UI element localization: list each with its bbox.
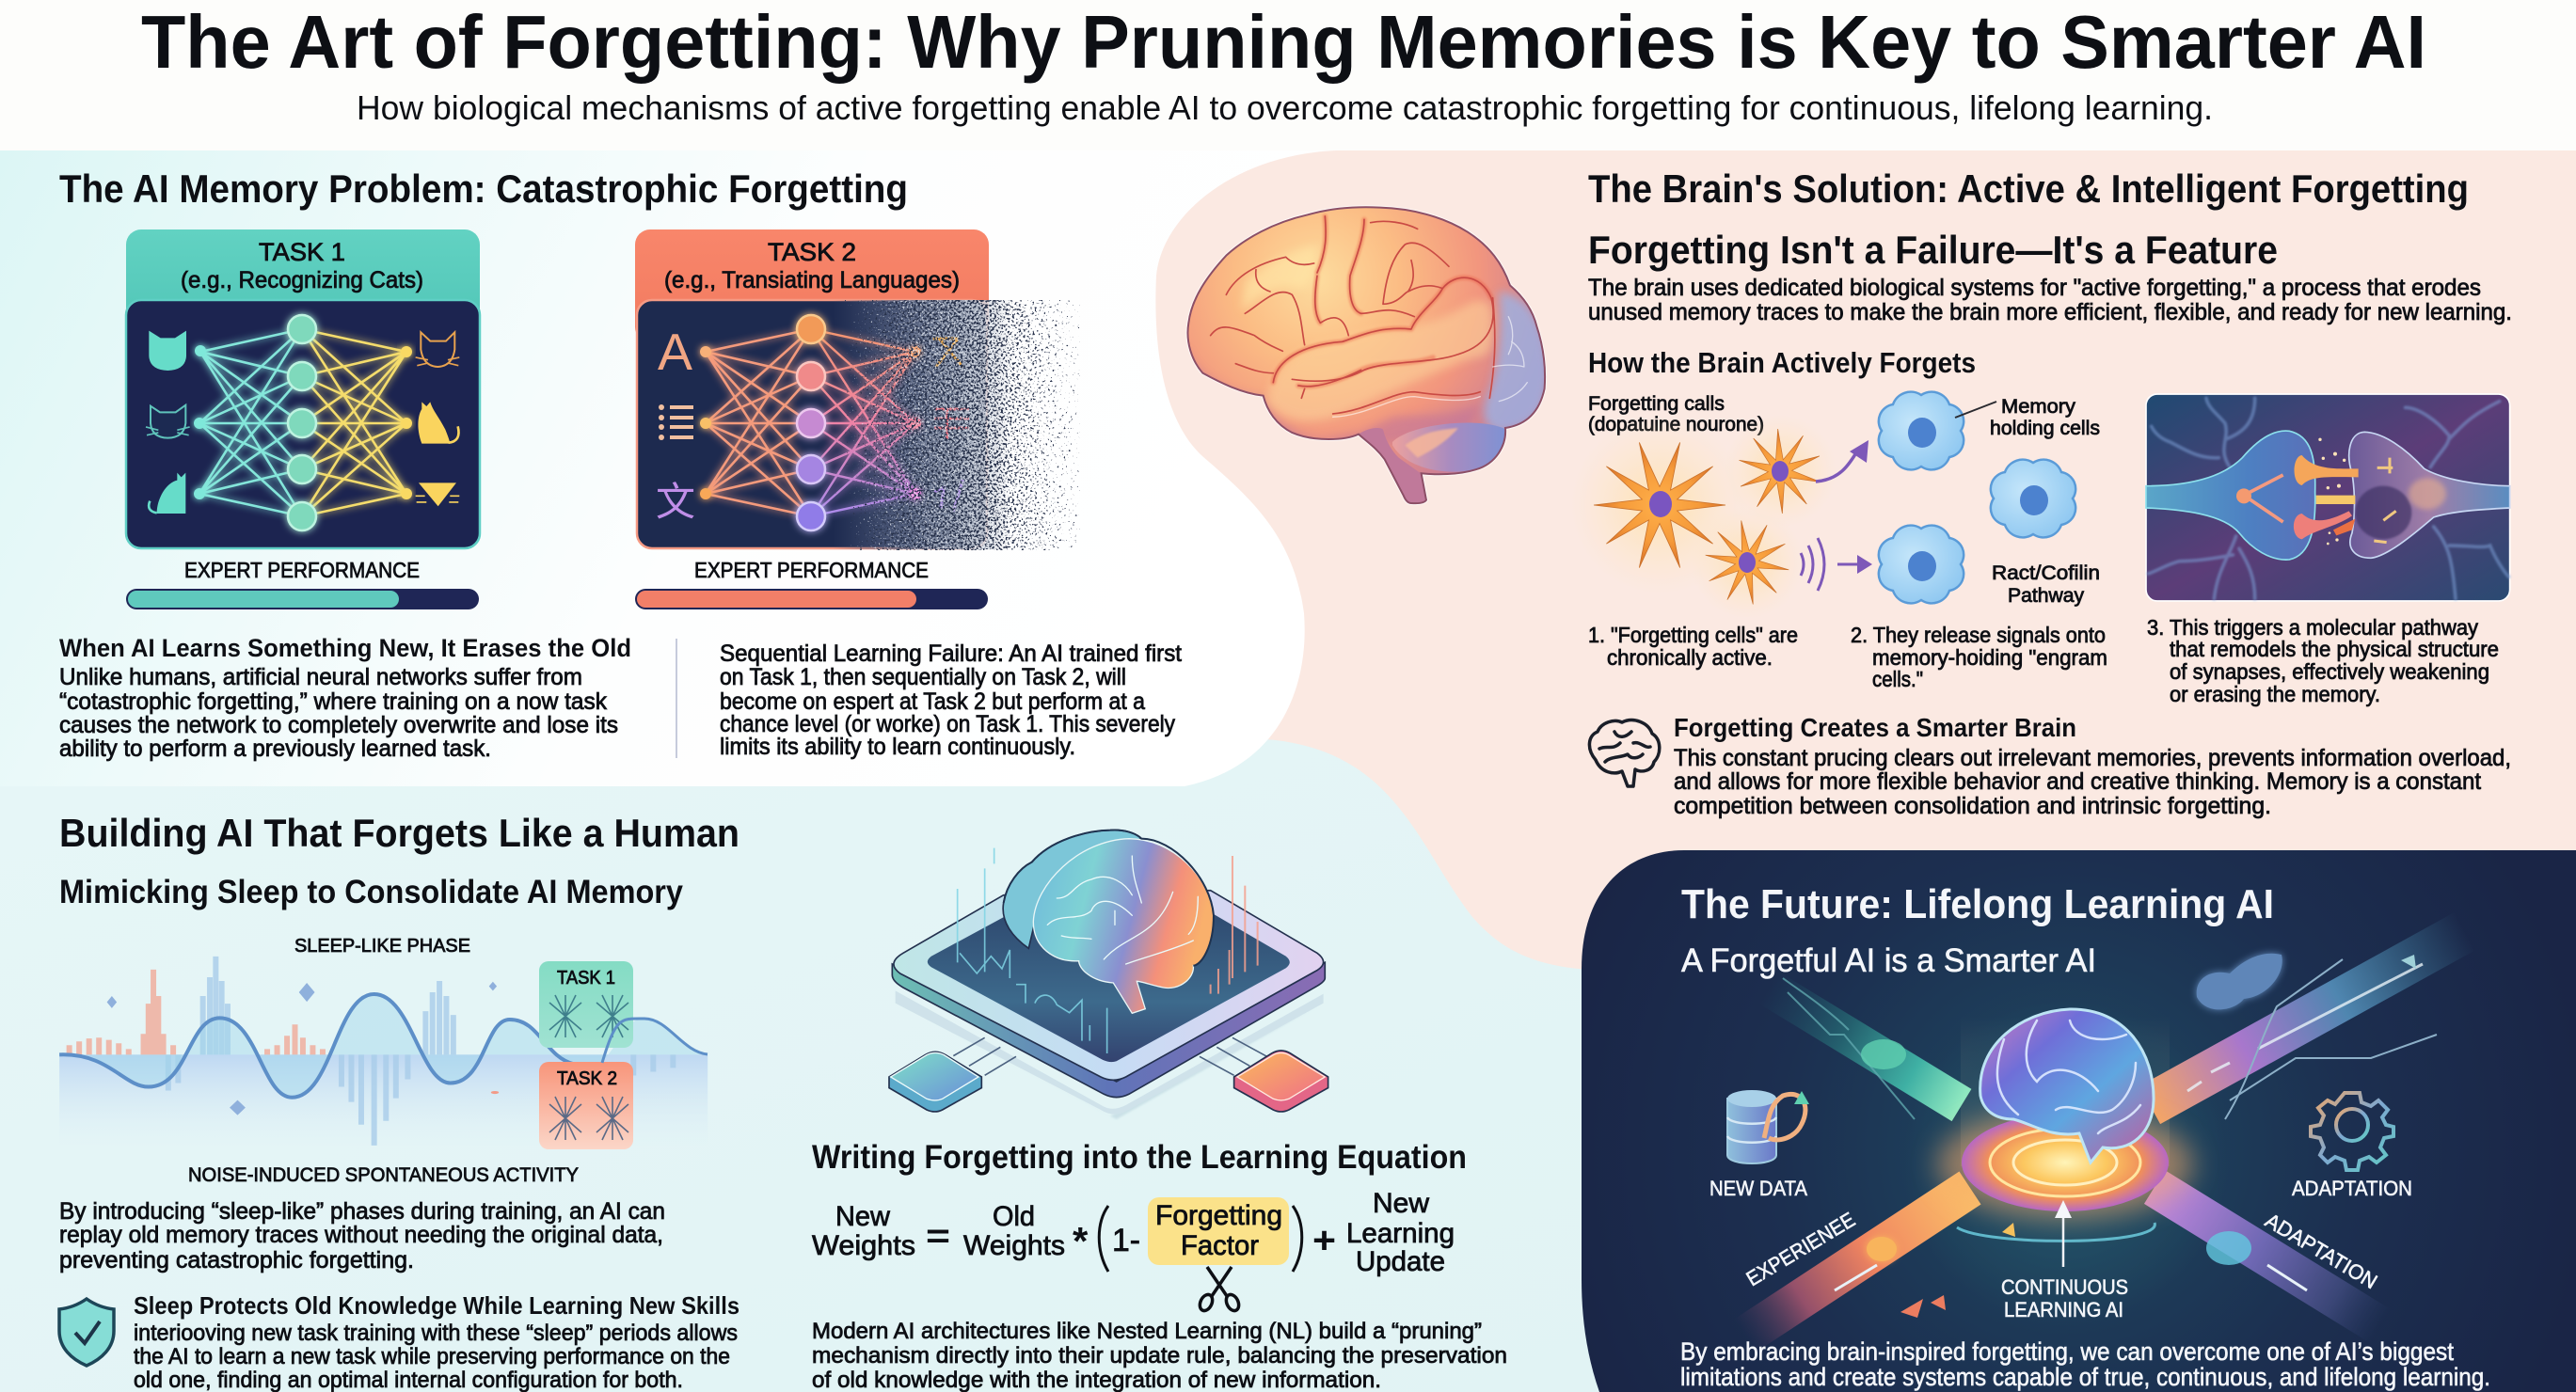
body text: left: Unlike humans, artificial neural networks suffer from [59,664,582,690]
equation [812,1188,1455,1277]
callout text: This constant prucing clears out irrelevant memories, prevents information overload, [1674,745,2511,771]
task 1 performance bar [126,589,479,609]
step 2 [1851,623,2107,691]
panel: building AI that forgets [59,811,1507,1392]
body text: preventing catastrophic forgetting. [59,1247,414,1273]
panel: the future [1582,850,2576,1392]
shield text [134,1321,738,1392]
step 3: that remodels the physical structure [2170,637,2499,661]
icon: CJK character: 文 [656,480,695,524]
task 1 sleep label: TASK 1 [557,968,615,989]
dissolving memory effect [828,300,1080,550]
callout text [1674,745,2511,819]
label: continuous learning AI: LEARNING AI [2004,1298,2123,1321]
step 1: chronically active. [1607,645,1773,670]
equation text: Modern AI architectures like Nested Learning (NL) build a “pruning” [812,1319,1482,1344]
label: adaptation (angled): ADAPTATION [2261,1209,2381,1293]
task 1 label: TASK 1 [259,238,345,266]
label: continuous learning AI [2001,1275,2128,1321]
step 2: 2. They release signals onto [1851,623,2106,647]
body text: unused memory traces to make the brain more efficient, flexible, and ready for new learning. [1588,299,2512,325]
task 1 sleep box [539,961,633,1048]
label: forgetting calls: Forgetting calls [1588,393,1725,415]
equation: Update [1356,1246,1445,1277]
task 2 card [59,229,1182,762]
body text: right: limits its ability to learn continuously. [720,734,1075,760]
icon: cloud [2197,954,2282,1009]
heading: Building AI That Forgets Like a Human [59,811,739,855]
equation: New [835,1201,890,1232]
forgetting factor highlight [1148,1197,1289,1265]
task 1 performance label: EXPERT PERFORMANCE [184,558,420,582]
body text: right: on Task 1, then sequentially on Task 2, will [720,664,1126,690]
body text [1588,275,2512,325]
body text: right: become on espert at Task 2 but perform at a [720,688,1145,715]
subtitle: How biological mechanisms of active forgetting enable AI to overcome catastrophic forgetting for continuous, lifelong learning. [357,88,2213,127]
subheading: A Forgetful AI is a Smarter AI [1681,942,2096,979]
step 1 [1588,623,1798,670]
icon: letter A: A [658,323,692,381]
neural network: task 1 [194,315,412,530]
background: pink brain region [1082,150,2576,1091]
equation text: mechanism directly into their update rule, balancing the preservation [812,1343,1507,1368]
diagram: forgetting cells and memory cells [1570,392,2075,619]
step 2: memory-hoiding "engram [1872,645,2107,670]
callout text: and allows for more flexible behavior and creative thinking. Memory is a constant [1674,768,2481,795]
body text: left: ability to perform a previously learned task. [59,736,491,762]
subheading: how: How the Brain Actively Forgets [1588,346,1976,379]
icon: scissors [1198,1267,1241,1313]
shield heading: Sleep Protects Old Knowledge While Learning New Skills [134,1291,739,1320]
task 2 label: TASK 2 [768,238,856,266]
equation: Old [993,1201,1035,1232]
closing text: limitations and create systems capable of true, continuous, and lifelong learning. [1680,1363,2490,1391]
body text: replay old memory traces without needing the original data, [59,1222,663,1248]
equation: * [1073,1219,1089,1263]
equation heading: Writing Forgetting into the Learning Equation [812,1139,1467,1176]
heading: The Future: Lifelong Learning AI [1681,881,2274,927]
label: pathway [1992,562,2100,607]
task 2 example: (e.g., Transiating Languages) [664,267,960,293]
signal waves and arrow [1801,538,1872,591]
body text: right [720,641,1182,760]
subheading: Mimicking Sleep to Consolidate AI Memory [59,874,683,910]
illustration: anatomical brain [1185,207,1549,503]
label: memory holding cells: holding cells [1990,418,2100,439]
step 3 [2147,615,2499,706]
step 3: 3. This triggers a molecular pathway [2147,615,2478,640]
callout heading: Forgetting Creates a Smarter Brain [1674,713,2076,742]
body text [59,1198,665,1273]
equation: Learning [1346,1218,1455,1249]
task 1 card [126,229,480,548]
task 1 example: (e.g., Recognizing Cats) [181,267,423,293]
step 3: of synapses, effectively weakening [2170,659,2489,684]
panel: brain's solution [1570,166,2512,819]
shield text: interiooving new task training with these “sleep” periods allows [134,1321,738,1346]
equation text [812,1319,1507,1392]
body text: left: “cotastrophic forgetting,” where training on a now task [59,688,607,715]
body text: left [59,664,618,762]
equation: Weights [812,1230,915,1261]
chart label: SLEEP-LIKE PHASE [294,936,470,957]
callout text: competition between consolidation and intrinsic forgetting. [1674,793,2271,819]
subheading: Forgetting Isn't a Failure—It's a Feature [1588,228,2278,272]
icon: shield [59,1299,114,1366]
forgetting factor highlight: Factor [1181,1230,1259,1261]
label: forgetting calls: (dopatuine nourone) [1588,414,1764,435]
task 2 performance label: EXPERT PERFORMANCE [694,558,929,582]
title: The Art of Forgetting: Why Pruning Memories is Key to Smarter AI [141,0,2426,84]
arrow: signal to memory cell [1816,440,1868,482]
label: continuous learning AI: CONTINUOUS [2001,1275,2128,1299]
label: forgetting calls [1588,393,1764,435]
icon: brain outline [1589,720,1660,786]
task 2 performance bar [635,589,988,609]
label: pathway: Pathway [2008,585,2085,607]
label: experience (angled): EXPERIENEE [1742,1208,1859,1290]
illustration: data ribbons [1745,931,2465,1336]
grey erosion layer [833,300,1011,549]
label: pathway: Ract/Cofilin [1992,562,2100,584]
icon: list [659,404,693,440]
closing text: By embracing brain-inspired forgetting, we can overcome one of AI’s biggest [1680,1337,2454,1366]
equation: Weights [963,1230,1065,1261]
subheading: When AI Learns Something New, It Erases the Old [59,634,631,662]
icons: cats [146,331,459,514]
step 1: 1. "Forgetting cells" are [1588,623,1798,647]
panel background card [0,150,1336,786]
illustration: glowing brain [1980,1009,2154,1163]
neural network: task 2 [700,315,921,530]
step 2: cells." [1872,667,1923,691]
heading: The Brain's Solution: Active & Intelligent Forgetting [1588,166,2469,211]
body text: By introducing “sleep-like” phases during training, an AI can [59,1198,665,1225]
equation: + [1312,1220,1336,1261]
body text: right: Sequential Learning Failure: An AI trained first [720,641,1182,667]
panel background [1582,850,2576,1392]
glowing core rings [1937,1110,2193,1219]
icon: gear [2311,1093,2393,1170]
shield text: the AI to learn a new task while preserving performance on the [134,1344,730,1369]
closing text [1680,1337,2490,1391]
heading: The AI Memory Problem: Catastrophic Forgetting [59,166,908,211]
background: pale blue lower-left region [0,739,1618,1392]
icon: database [1727,1090,1809,1163]
chart caption: NOISE-INDUCED SPONTANEOUS ACTIVITY [188,1164,579,1186]
label: memory holding cells: Memory [2001,396,2076,418]
label: memory holding cells [1990,396,2100,439]
label: new data: NEW DATA [1709,1177,1807,1200]
equation: 1- [1112,1223,1140,1258]
arrow: up to core [2055,1200,2072,1267]
illustration: synapse [2146,394,2510,601]
task 2 sleep label: TASK 2 [557,1068,617,1089]
equation: New [1373,1188,1429,1219]
task 2 sleep box [539,1062,633,1149]
body text: The brain uses dedicated biological systems for "active forgetting," a process that erodes [1588,275,2481,301]
illustration: brain on chip [889,830,1328,1119]
body text: right: chance level (or worke) on Task 1. This severely [720,711,1175,737]
step 3: or erasing the memory. [2170,682,2380,706]
forgetting factor highlight: Forgetting [1155,1200,1282,1231]
chart: sleep wave [59,957,708,1146]
equation: = [926,1216,950,1255]
body text: left: causes the network to completely overwrite and lose its [59,712,618,738]
label: adaptation: ADAPTATION [2292,1177,2412,1200]
